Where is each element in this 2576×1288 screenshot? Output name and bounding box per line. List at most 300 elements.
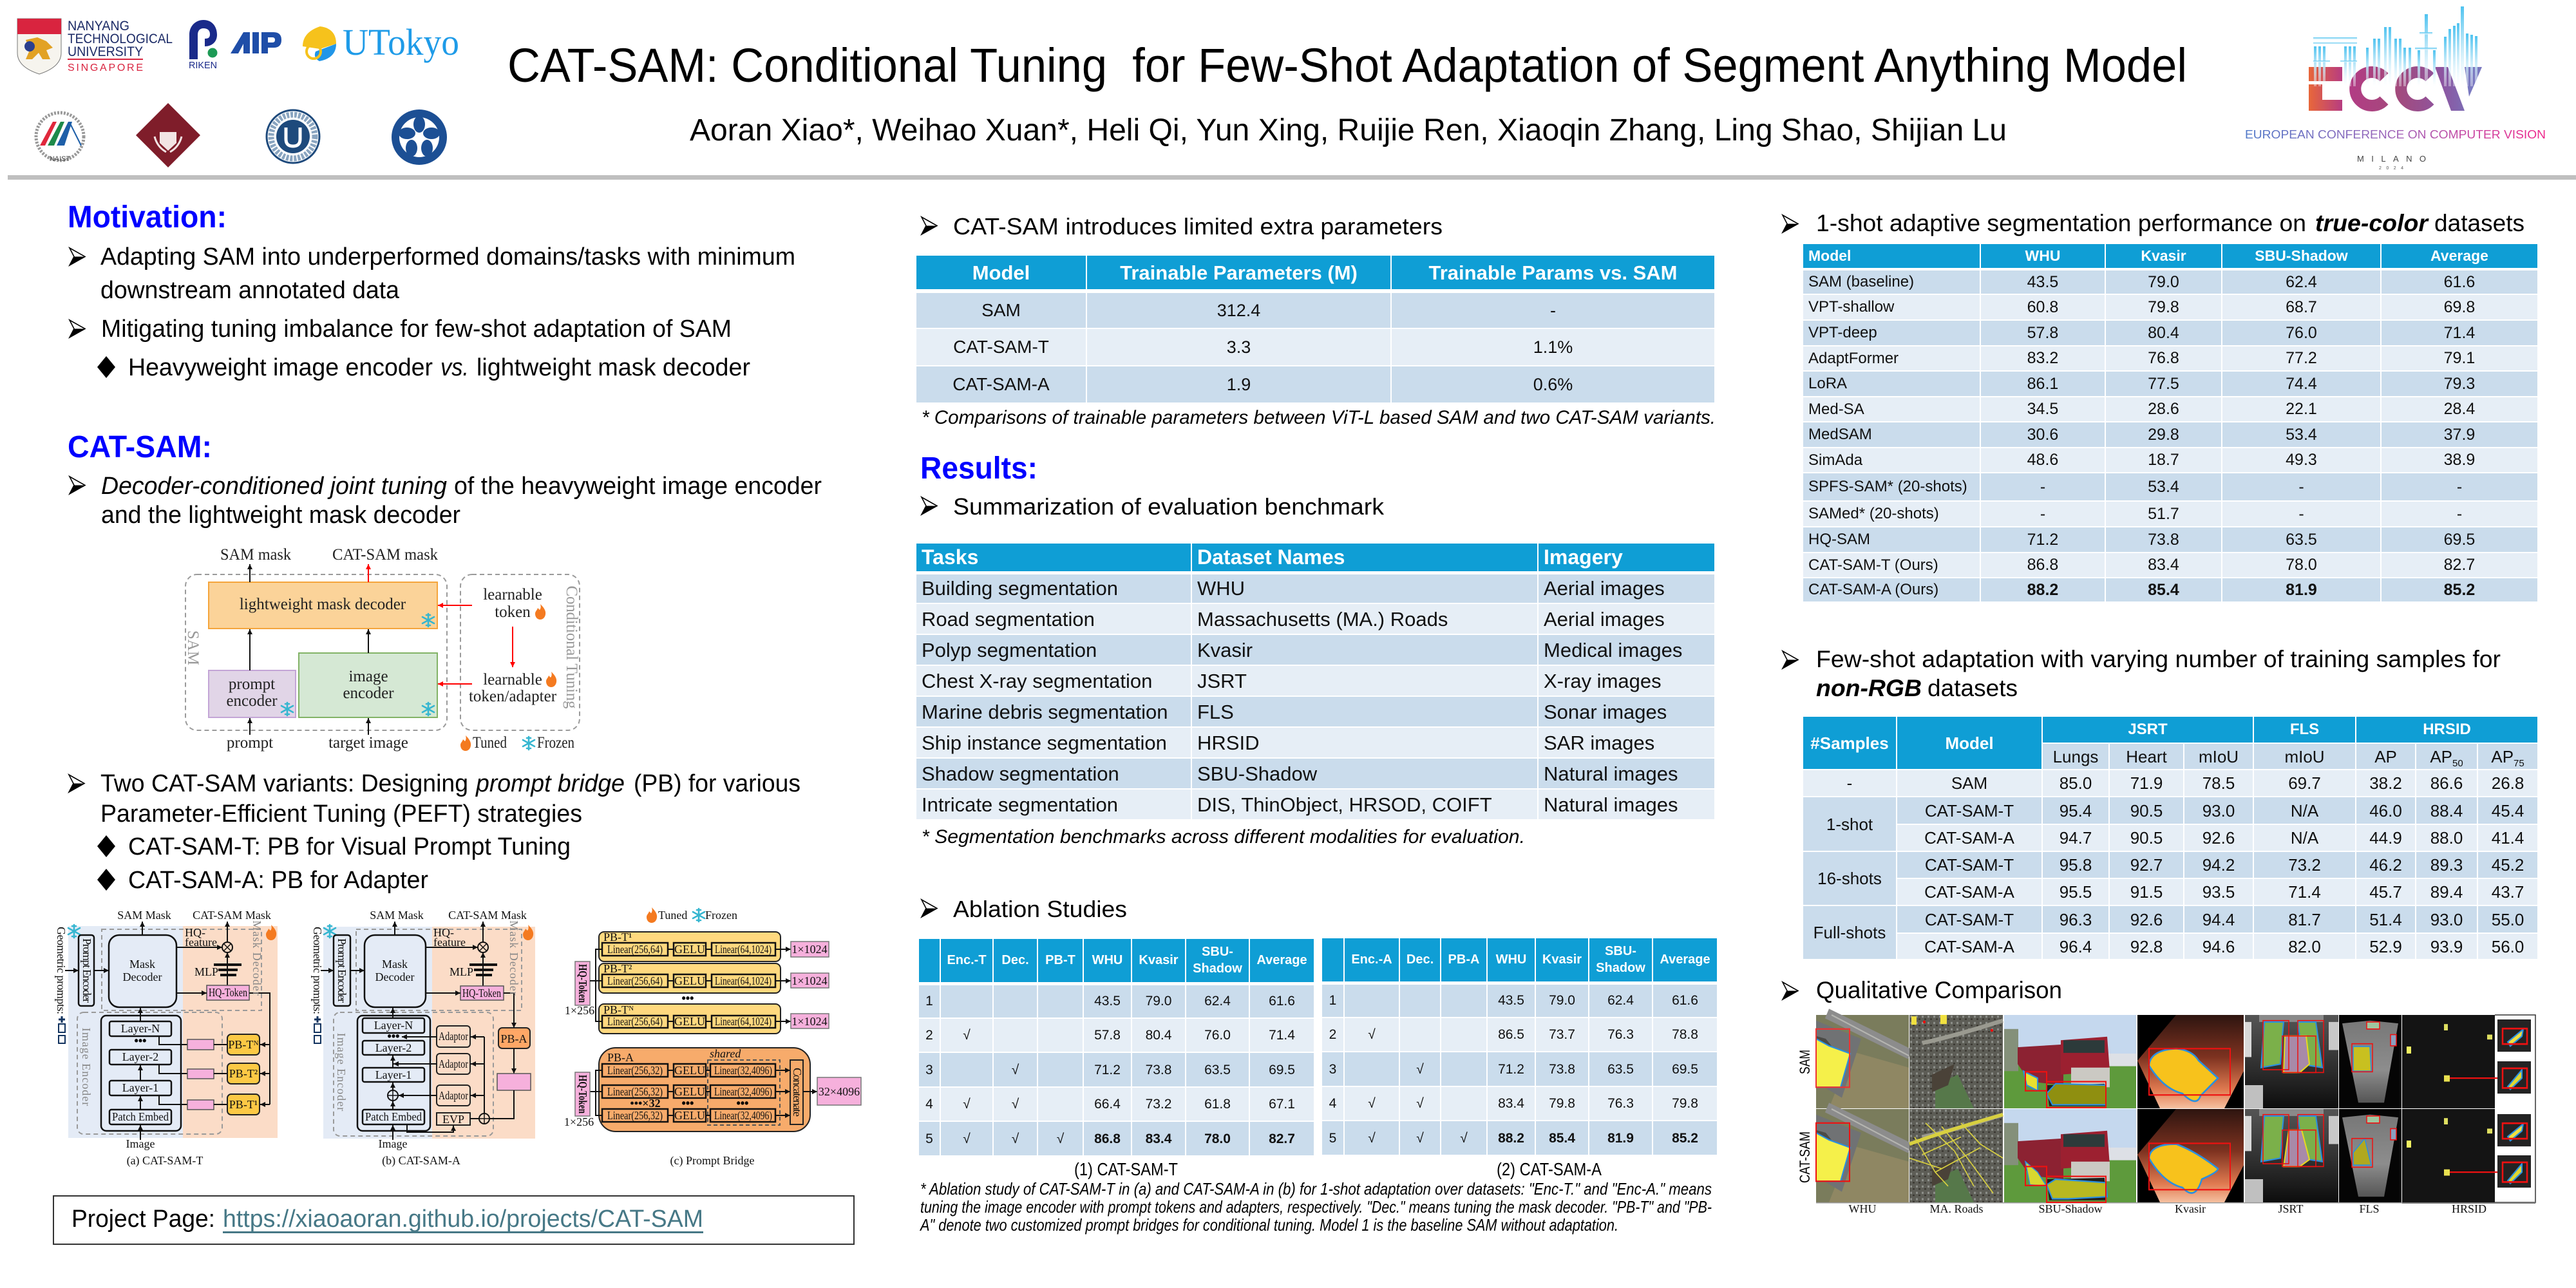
diagram: (b) CAT-SAM-A architecture: Prompt Encoder (336, 938, 348, 1003)
table: 1-shot true-color performance: 51.7 (2148, 505, 2179, 523)
diagram: (c) Prompt Bridge: GELU (674, 1085, 705, 1098)
table: 1-shot true-color performance: 37.9 (2444, 425, 2475, 443)
diagram: (a) CAT-SAM-T architecture: feature (185, 936, 217, 949)
dataset labels: SBU-Shadow (2038, 1202, 2103, 1215)
table: few-shot non-RGB adaptation: CAT-SAM-T (1925, 909, 2014, 929)
table: 1-shot true-color performance: - (2298, 478, 2304, 496)
bullet: qualitative comparison: Qualitative Comparison (1816, 977, 2062, 1003)
logo: Nanyang Technological University: NANYANG (68, 19, 129, 33)
table: ablation CAT-SAM-A (1322, 938, 1717, 1155)
table: ablation CAT-SAM-T: 69.5 (1269, 1063, 1295, 1077)
table: few-shot non-RGB adaptation: 93.9 (2430, 936, 2463, 956)
table: 1-shot true-color performance (1803, 244, 2537, 601)
table: few-shot non-RGB adaptation: 46.0 (2369, 801, 2402, 820)
bullet: true-color performance: true-color (2315, 210, 2430, 236)
table: few-shot non-RGB adaptation: 45.2 (2492, 855, 2524, 875)
table: few-shot non-RGB adaptation: CAT-SAM-A (1924, 882, 2014, 902)
table: 1-shot true-color performance: 38.9 (2444, 451, 2475, 469)
table: ablation CAT-SAM-A: WHU (1496, 952, 1526, 967)
two CAT-SAM variants bullets: (PB) for various (634, 770, 800, 797)
table: ablation CAT-SAM-T: √ (1012, 1097, 1019, 1112)
diagram: (c) Prompt Bridge: GELU (674, 974, 705, 987)
diagram: (c) Prompt Bridge: Linear(256,32) (607, 1064, 663, 1077)
table: ablation CAT-SAM-A: 62.4 (1607, 993, 1634, 1008)
table: few-shot non-RGB adaptation: mIoU (2199, 747, 2239, 766)
diagram: (c) Prompt Bridge: HQ-Token (576, 964, 589, 1003)
logo: ECCV 2024 Milano: 2024 (2379, 166, 2403, 171)
project page box: https://xiaoaoran.github.io/projects/CAT-SAM (223, 1206, 703, 1233)
table: evaluation benchmarks: Building segmentation (922, 577, 1118, 600)
table: ablation CAT-SAM-T: √ (1057, 1131, 1064, 1146)
figure: qualitative comparison image grid: SAM (1797, 1050, 1813, 1074)
diagram: (c) Prompt Bridge: Linear(256,32) (607, 1109, 663, 1122)
diagram: (b) CAT-SAM-A architecture: SAM Mask (370, 909, 424, 922)
table: ablation CAT-SAM-A: √ (1416, 1131, 1424, 1145)
dataset labels: WHU (1848, 1202, 1877, 1215)
diagram: (b) CAT-SAM-A architecture: HQ- (433, 926, 454, 939)
table: ablation CAT-SAM-T: 78.0 (1204, 1131, 1231, 1146)
table: 1-shot true-color performance: 82.7 (2444, 556, 2475, 574)
table: ablation CAT-SAM-T: 83.4 (1146, 1131, 1171, 1146)
dataset labels: FLS (2359, 1202, 2380, 1215)
dataset labels: Kvasir (2175, 1202, 2206, 1215)
table: ablation CAT-SAM-T (919, 939, 1314, 1155)
diagram: SAM and conditional tuning overview: Conditional Tuning (563, 586, 580, 709)
table: 1-shot true-color performance: Average (2430, 247, 2488, 264)
diagram: (a) CAT-SAM-T architecture: PB-T² (229, 1067, 258, 1080)
diagram: (a) CAT-SAM-T architecture: Layer-2 (122, 1050, 158, 1063)
diagram: SAM and conditional tuning overview: encoder (343, 685, 394, 702)
diagram: SAM and conditional tuning overview: prompt (227, 734, 273, 752)
table: 1-shot true-color performance: 80.4 (2148, 323, 2179, 341)
diagram: (c) Prompt Bridge: 1×256 (565, 1004, 594, 1017)
table: 1-shot true-color performance: SAMed* (20-shots) (1808, 505, 1939, 522)
table: few-shot non-RGB adaptation: SAM (1951, 773, 1987, 793)
table: few-shot non-RGB adaptation: 95.8 (2060, 855, 2092, 875)
table: ablation CAT-SAM-A: 88.2 (1498, 1131, 1524, 1145)
table: ablation CAT-SAM-T: WHU (1092, 953, 1122, 967)
table: few-shot non-RGB adaptation: 82.0 (2288, 936, 2321, 956)
caption: ablation CAT-SAM-T: (1) CAT-SAM-T (1074, 1159, 1178, 1179)
table: 1-shot true-color performance: 79.3 (2444, 375, 2475, 393)
table: evaluation benchmarks: Natural images (1544, 762, 1678, 784)
bullet: few-shot non-RGB: non-RGB (1816, 675, 1922, 701)
table: ablation CAT-SAM-A: 76.3 (1607, 1027, 1634, 1042)
table: 1-shot true-color performance: 77.5 (2148, 375, 2179, 393)
bullet: ablation studies: Ablation Studies (953, 896, 1127, 922)
table: ablation CAT-SAM-T: 82.7 (1269, 1131, 1295, 1146)
diagram: SAM and conditional tuning overview: target image (328, 734, 408, 752)
diagram: (b) CAT-SAM-A architecture: Layer-N (374, 1019, 413, 1032)
heading: CAT-SAM: CAT-SAM: (68, 430, 212, 464)
table: 1-shot true-color performance: 76.8 (2148, 349, 2179, 367)
table: ablation CAT-SAM-A: Average (1660, 952, 1710, 967)
table: few-shot non-RGB adaptation: 45.4 (2492, 801, 2524, 820)
table: few-shot non-RGB adaptation: 94.7 (2060, 828, 2092, 848)
table: 1-shot true-color performance: 48.6 (2027, 451, 2058, 469)
caption: ablation CAT-SAM-A: (2) CAT-SAM-A (1497, 1159, 1602, 1179)
table: few-shot non-RGB adaptation: 89.3 (2430, 855, 2463, 875)
table: ablation CAT-SAM-T: 79.0 (1146, 994, 1171, 1009)
table: 1-shot true-color performance: 61.6 (2444, 273, 2475, 291)
diagram: (c) Prompt Bridge: PB-Tᴺ (603, 1003, 634, 1016)
table: trainable parameters: 1.9 (1227, 375, 1251, 394)
diagram: (c) Prompt Bridge: GELU (674, 1015, 705, 1028)
table: few-shot non-RGB adaptation: 38.2 (2369, 773, 2402, 793)
table: ablation CAT-SAM-T: 4 (925, 1097, 933, 1112)
table: evaluation benchmarks (916, 544, 1714, 819)
table: few-shot non-RGB adaptation: 93.0 (2430, 909, 2463, 929)
table: few-shot non-RGB adaptation: CAT-SAM-A (1924, 936, 2014, 956)
diagram: (a) CAT-SAM-T architecture: CAT-SAM Mask (193, 909, 271, 922)
table: ablation CAT-SAM-A: √ (1368, 1027, 1376, 1042)
logo: Nanyang Technological University: UNIVERSITY (68, 44, 143, 59)
table: few-shot non-RGB adaptation: AP75 (2491, 747, 2524, 769)
table: trainable parameters: CAT-SAM-A (952, 374, 1050, 394)
table: few-shot non-RGB adaptation: 45.7 (2369, 882, 2402, 902)
two CAT-SAM variants bullets: CAT-SAM-T: PB for Visual Prompt Tuning (128, 833, 571, 860)
diagram: (c) Prompt Bridge: Linear(256,64) (607, 974, 663, 988)
diagram: SAM and conditional tuning overview: prompt (229, 676, 275, 693)
two CAT-SAM variants bullets: prompt bridge (475, 770, 625, 797)
diagram: (b) CAT-SAM-A architecture: Layer-1 (375, 1068, 412, 1081)
table: ablation CAT-SAM-A: 83.4 (1498, 1096, 1524, 1111)
table: few-shot non-RGB adaptation: 69.7 (2288, 773, 2321, 793)
table: ablation CAT-SAM-T: √ (963, 1097, 971, 1112)
logo: RIKEN (189, 20, 218, 71)
table: few-shot non-RGB adaptation: 26.8 (2492, 773, 2524, 793)
table: ablation CAT-SAM-A: Enc.-A (1351, 952, 1392, 967)
table: 1-shot true-color performance: - (2040, 505, 2045, 523)
table: few-shot non-RGB adaptation: 85.0 (2060, 773, 2092, 793)
table: few-shot non-RGB adaptation: 89.4 (2430, 882, 2463, 902)
table: ablation CAT-SAM-T: Kvasir (1139, 953, 1179, 967)
diagram: SAM and conditional tuning overview: lightweight mask decoder (240, 596, 406, 613)
motivation bullets: downstream annotated data (100, 277, 400, 304)
motivation bullets: vs. (440, 354, 469, 381)
motivation bullets (70, 243, 795, 381)
table: few-shot non-RGB adaptation: - (1847, 773, 1852, 793)
table: 1-shot true-color performance: 60.8 (2027, 298, 2058, 316)
table: 1-shot true-color performance: VPT-shallow (1808, 298, 1894, 316)
table: ablation CAT-SAM-T: Dec. (1001, 953, 1029, 967)
diagram: (b) CAT-SAM-A architecture: PB-A (500, 1032, 527, 1045)
diagram: (c) Prompt Bridge: PB-A (607, 1051, 634, 1064)
CAT-SAM joint tuning bullet: Decoder-conditioned joint tuning (101, 473, 447, 500)
table: evaluation benchmarks: Aerial images (1544, 577, 1665, 600)
table: ablation CAT-SAM-T: 86.8 (1094, 1131, 1121, 1146)
table: 1-shot true-color performance: - (2457, 505, 2462, 523)
diagram: (c) Prompt Bridge: shared (710, 1047, 741, 1060)
table: ablation CAT-SAM-T: 66.4 (1094, 1097, 1121, 1112)
table: 1-shot true-color performance: 68.7 (2286, 298, 2317, 316)
table: 1-shot true-color performance: - (2040, 478, 2045, 496)
diagram: (c) Prompt Bridge: Linear(32,4096) (714, 1085, 772, 1099)
logo: RIKEN: RIKEN (189, 60, 217, 71)
table: few-shot non-RGB adaptation: Full-shots (1814, 923, 1886, 942)
table: 1-shot true-color performance: 74.4 (2286, 375, 2317, 393)
diagram: (c) Prompt Bridge (564, 907, 861, 1168)
table: 1-shot true-color performance: - (2298, 505, 2304, 523)
diagram: (b) CAT-SAM-A architecture: Mask Decoder (507, 920, 520, 996)
diagram: SAM and conditional tuning overview: image (348, 668, 388, 685)
table: few-shot non-RGB adaptation: #Samples (1810, 733, 1889, 752)
diagram: (c) Prompt Bridge: 1×1024 (791, 1015, 828, 1028)
diagram: (b) CAT-SAM-A architecture: EVP (442, 1113, 464, 1126)
bullet: true-color performance: 1-shot adaptive segmentation performance on (1816, 210, 2306, 236)
table: evaluation benchmarks: Kvasir (1197, 639, 1253, 661)
table: few-shot non-RGB adaptation: 91.5 (2130, 882, 2163, 902)
dataset labels: MA. Roads (1929, 1202, 1984, 1215)
table: ablation CAT-SAM-T: √ (963, 1028, 971, 1043)
table: few-shot non-RGB adaptation: 92.6 (2130, 909, 2163, 929)
table: few-shot non-RGB adaptation (1803, 717, 2537, 959)
figure: qualitative comparison image grid: CAT-SAM (1797, 1132, 1813, 1183)
diagram: SAM and conditional tuning overview: Tuned (473, 734, 507, 752)
table: trainable parameters: CAT-SAM-T (953, 337, 1049, 357)
table: ablation CAT-SAM-T: 71.2 (1094, 1063, 1121, 1077)
table: 1-shot true-color performance: 43.5 (2027, 273, 2058, 291)
table: trainable parameters: Trainable Params vs. SAM (1429, 261, 1677, 283)
table: trainable parameters: - (1550, 300, 1556, 319)
table: few-shot non-RGB adaptation: 94.2 (2202, 855, 2235, 875)
table: few-shot non-RGB adaptation: 92.8 (2130, 936, 2163, 956)
bullet: true-color performance (1783, 210, 2524, 236)
table: few-shot non-RGB adaptation: 56.0 (2492, 936, 2524, 956)
table: ablation CAT-SAM-T: 1 (925, 994, 933, 1009)
table: 1-shot true-color performance: LoRA (1808, 375, 1847, 392)
table: 1-shot true-color performance: 49.3 (2286, 451, 2317, 469)
table: evaluation benchmarks: Tasks (922, 545, 978, 569)
diagram: (a) CAT-SAM-T architecture: Layer-1 (122, 1081, 158, 1094)
dataset labels: JSRT (2278, 1202, 2303, 1215)
table: few-shot non-RGB adaptation: 90.5 (2130, 828, 2163, 848)
bullet: evaluation benchmark: Summarization of evaluation benchmark (953, 493, 1385, 520)
logo: Nanyang Technological University: TECHNOLOGICAL (68, 32, 173, 46)
diagram: (c) Prompt Bridge: 1×256 (564, 1115, 594, 1128)
diagram: (b) CAT-SAM-A architecture: CAT-SAM Mask (448, 909, 527, 922)
diagram: (b) CAT-SAM-A architecture: HQ-Token (462, 987, 501, 999)
table: few-shot non-RGB adaptation: 95.5 (2060, 882, 2092, 902)
diagram: SAM and conditional tuning overview: SAM (184, 630, 202, 665)
diagram: (a) CAT-SAM-T architecture: (a) CAT-SAM-T (127, 1154, 203, 1168)
diagram: (a) CAT-SAM-T architecture: MLP (194, 965, 218, 978)
row: SAM results (1816, 1014, 2531, 1108)
table: ablation CAT-SAM-A: 63.5 (1607, 1061, 1634, 1077)
table: evaluation benchmarks: Dataset Names (1197, 545, 1345, 569)
table: ablation CAT-SAM-T: Average (1256, 953, 1307, 967)
table: ablation CAT-SAM-T: Enc.-T (947, 953, 987, 967)
table: 1-shot true-color performance: SBU-Shadow (2255, 247, 2348, 264)
diagram: (b) CAT-SAM-A architecture: MLP (450, 965, 473, 978)
bullet: few-shot non-RGB: datasets (1927, 675, 2018, 701)
diagram: (c) Prompt Bridge: Linear(64,1024) (715, 1015, 772, 1028)
diagram: (c) Prompt Bridge: PB-T¹ (603, 931, 632, 943)
two CAT-SAM variants bullets: Two CAT-SAM variants: Designing (100, 770, 468, 797)
table: 1-shot true-color performance: 79.1 (2444, 349, 2475, 367)
motivation bullets: Adapting SAM into underperformed domains/tasks with minimum (100, 243, 795, 270)
diagram: (b) CAT-SAM-A architecture: Mask (382, 958, 408, 971)
table: ablation CAT-SAM-A: 86.5 (1498, 1027, 1524, 1042)
table: 1-shot true-color performance: 22.1 (2286, 400, 2317, 418)
project page box: Project Page: (71, 1206, 215, 1233)
table: trainable parameters: Model (972, 261, 1030, 283)
table: few-shot non-RGB adaptation: 92.6 (2202, 828, 2235, 848)
table: evaluation benchmarks: Road segmentation (922, 608, 1095, 630)
table: 1-shot true-color performance: 71.2 (2027, 531, 2058, 549)
diagram: (c) Prompt Bridge: HQ-Token (576, 1075, 589, 1113)
heading: Results: Results: (920, 451, 1037, 486)
motivation bullets: Heavyweight image encoder (128, 354, 433, 381)
diagram: (a) CAT-SAM-T architecture: SAM Mask (117, 909, 171, 922)
table: ablation CAT-SAM-T: 3 (925, 1063, 933, 1077)
table: 1-shot true-color performance: Kvasir (2141, 247, 2186, 264)
diagram: (c) Prompt Bridge: ••• (682, 992, 694, 1005)
table: 1-shot true-color performance: AdaptFormer (1808, 349, 1899, 367)
table: ablation CAT-SAM-A: √ (1416, 1096, 1424, 1111)
table: 1-shot true-color performance: 69.5 (2444, 531, 2475, 549)
diagram: (c) Prompt Bridge: Tuned (658, 909, 687, 922)
logo: AIP (231, 32, 281, 53)
table: 1-shot true-color performance: 76.0 (2286, 323, 2317, 341)
diagram: SAM and conditional tuning overview: token/adapter (469, 688, 557, 705)
table: few-shot non-RGB adaptation: 71.4 (2288, 882, 2321, 902)
table: ablation CAT-SAM-A: 4 (1329, 1096, 1336, 1111)
table: ablation CAT-SAM-A: 5 (1329, 1131, 1336, 1145)
table: few-shot non-RGB adaptation: 1-shot (1826, 814, 1873, 833)
diagram: (b) CAT-SAM-A architecture: Geometric prompts: (311, 927, 324, 1014)
row: CAT-SAM results (1816, 1108, 2531, 1202)
table: 1-shot true-color performance: WHU (2025, 247, 2060, 264)
table: trainable parameters: 0.6% (1533, 375, 1573, 394)
table: ablation CAT-SAM-A: 73.7 (1549, 1027, 1575, 1042)
table: 1-shot true-color performance: 28.4 (2444, 400, 2475, 418)
table: few-shot non-RGB adaptation: 71.9 (2130, 773, 2163, 793)
table: 1-shot true-color performance: 73.8 (2148, 531, 2179, 549)
table: few-shot non-RGB adaptation: 44.9 (2369, 828, 2402, 848)
logo: ECCV 2024 Milano: MILANO (2357, 154, 2426, 164)
bullet: limited extra parameters: CAT-SAM introduces limited extra parameters (953, 213, 1443, 240)
table: few-shot non-RGB adaptation: AP50 (2430, 747, 2463, 769)
table: 1-shot true-color performance: 63.5 (2286, 531, 2317, 549)
table: few-shot non-RGB adaptation: 55.0 (2492, 909, 2524, 929)
diagram: (b) CAT-SAM-A architecture (311, 909, 535, 1168)
table: evaluation benchmarks: Aerial images (1544, 608, 1665, 630)
table: trainable parameters: SAM (981, 300, 1021, 320)
diagram: SAM and conditional tuning overview: CAT-SAM mask (332, 546, 438, 564)
table: 1-shot true-color performance: 81.9 (2286, 581, 2317, 599)
figure: qualitative comparison image grid (1797, 1014, 2535, 1215)
diagram: (a) CAT-SAM-T architecture: PB-T¹ (229, 1098, 258, 1111)
table: 1-shot true-color performance: 85.2 (2444, 581, 2475, 599)
table: few-shot non-RGB adaptation: 93.0 (2202, 801, 2235, 820)
diagram: (b) CAT-SAM-A architecture: Decoder (375, 971, 414, 983)
table: evaluation benchmarks: FLS (1197, 701, 1234, 723)
diagram: SAM and conditional tuning overview: token (495, 603, 531, 621)
table: evaluation benchmarks: Massachusetts (MA.) Roads (1197, 608, 1448, 630)
table: few-shot non-RGB adaptation: 95.4 (2060, 801, 2092, 820)
diagram: (b) CAT-SAM-A architecture: Image Encoder (335, 1033, 348, 1112)
table: 1-shot true-color performance: 83.2 (2027, 349, 2058, 367)
diagram: (c) Prompt Bridge: Concatenate (791, 1068, 804, 1117)
table: 1-shot true-color performance: 86.8 (2027, 556, 2058, 574)
diagram: SAM and conditional tuning overview: SAM mask (220, 546, 291, 564)
table: ablation CAT-SAM-T: 61.6 (1269, 994, 1295, 1009)
diagram: (c) Prompt Bridge: Linear(256,64) (607, 1015, 663, 1028)
table: few-shot non-RGB adaptation: 93.5 (2202, 882, 2235, 902)
table: ablation CAT-SAM-A: PB-A (1448, 952, 1479, 967)
logo: NAIST: NAIST (50, 155, 70, 163)
table: 1-shot true-color performance: 62.4 (2286, 273, 2317, 291)
table: ablation CAT-SAM-A: 78.8 (1672, 1027, 1698, 1042)
table: few-shot non-RGB adaptation: 92.7 (2130, 855, 2163, 875)
diagram: (a) CAT-SAM-T architecture: HQ- (185, 926, 205, 939)
logo: Wenzhou University (267, 110, 319, 163)
diagram: (c) Prompt Bridge: 1×1024 (791, 974, 828, 987)
table: ablation CAT-SAM-A: Kvasir (1542, 952, 1582, 967)
table: ablation CAT-SAM-A: 85.2 (1672, 1131, 1698, 1145)
table: trainable parameters: 1.1% (1533, 337, 1573, 357)
table: evaluation benchmarks: WHU (1197, 577, 1245, 600)
diagram: (c) Prompt Bridge: 32×4096 (819, 1085, 860, 1098)
table: evaluation benchmarks: Imagery (1544, 545, 1623, 569)
diagram: SAM and conditional tuning overview: learnable (483, 671, 542, 688)
table: 1-shot true-color performance: 85.4 (2148, 581, 2179, 599)
table: ablation CAT-SAM-T: 63.5 (1204, 1063, 1231, 1077)
table: ablation CAT-SAM-A: 43.5 (1498, 993, 1524, 1008)
table: few-shot non-RGB adaptation: CAT-SAM-A (1924, 828, 2014, 848)
table: 1-shot true-color performance: SimAda (1808, 451, 1862, 469)
diagram: (b) CAT-SAM-A architecture: Adaptor (439, 1089, 468, 1102)
note: parameter comparison: * Comparisons of trainable parameters between ViT-L based SAM and two CAT-SAM variants. (922, 407, 1716, 428)
table: ablation CAT-SAM-A: √ (1368, 1096, 1376, 1111)
table: few-shot non-RGB adaptation: 88.4 (2430, 801, 2463, 820)
table: 1-shot true-color performance: Med-SA (1808, 401, 1864, 417)
diagram: (b) CAT-SAM-A architecture: Adaptor (439, 1057, 468, 1070)
CAT-SAM joint tuning bullet: and the lightweight mask decoder (101, 502, 460, 529)
table: evaluation benchmarks: Polyp segmentation (922, 639, 1097, 661)
header divider (8, 175, 2576, 180)
diagram: (c) Prompt Bridge: (c) Prompt Bridge (670, 1154, 754, 1168)
diagram: (a) CAT-SAM-T architecture: HQ-Token (209, 986, 247, 999)
table: evaluation benchmarks: Sonar images (1544, 701, 1667, 723)
diagram: (a) CAT-SAM-T architecture: ••• (135, 1034, 146, 1047)
diagram: (c) Prompt Bridge: GELU (674, 1064, 705, 1077)
table: 1-shot true-color performance: 79.8 (2148, 298, 2179, 316)
table: trainable parameters (916, 256, 1714, 402)
diagram: (c) Prompt Bridge: PB-T² (603, 962, 632, 975)
table: few-shot non-RGB adaptation: N/A (2291, 801, 2318, 820)
table: evaluation benchmarks: DIS, ThinObject, HRSOD, COIFT (1197, 793, 1492, 815)
table: few-shot non-RGB adaptation: 16-shots (1817, 869, 1882, 888)
diagram: (a) CAT-SAM-T architecture: PB-Tᴺ (228, 1038, 259, 1051)
logo: ECCV 2024 Milano: EUROPEAN CONFERENCE ON COMPUTER VISION (2245, 128, 2546, 141)
table: ablation CAT-SAM-T: 57.8 (1094, 1028, 1121, 1043)
table: few-shot non-RGB adaptation: 73.2 (2288, 855, 2321, 875)
diagram: (a) CAT-SAM-T architecture: Mask (129, 958, 155, 971)
project page box (53, 1196, 854, 1244)
table: few-shot non-RGB adaptation: 81.7 (2288, 909, 2321, 929)
table: few-shot non-RGB adaptation: Lungs (2053, 747, 2098, 766)
table: 1-shot true-color performance: HQ-SAM (1808, 531, 1870, 548)
diagram: SAM and conditional tuning overview: learnable (483, 586, 542, 603)
table: 1-shot true-color performance: SAM (baseline) (1808, 273, 1914, 290)
table: ablation CAT-SAM-A: 73.8 (1549, 1061, 1575, 1077)
table: ablation CAT-SAM-T: 71.4 (1269, 1028, 1295, 1043)
logo: Nanyang Technological University (17, 19, 173, 74)
table: few-shot non-RGB adaptation: 94.4 (2202, 909, 2235, 929)
diagram: (b) CAT-SAM-A architecture: Patch Embed (365, 1110, 422, 1123)
